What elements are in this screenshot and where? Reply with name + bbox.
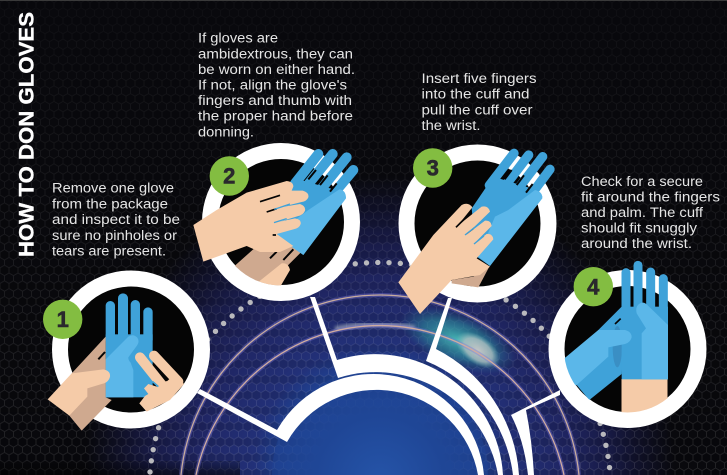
step 2 text: donning. (198, 124, 254, 139)
step 2 text: the proper hand before (198, 109, 353, 124)
wrist of right hand (622, 379, 668, 412)
badge 2 (210, 156, 249, 196)
right hand holding glove (139, 356, 184, 412)
top hand over glove (193, 181, 308, 262)
glove laid flat (270, 154, 353, 255)
glove partly on hand (472, 153, 550, 266)
badge 1 (43, 300, 82, 339)
step 3 text: the wrist. (422, 118, 480, 133)
step 4 text: around the wrist. (581, 236, 692, 251)
badge 1: 1 (57, 307, 69, 332)
gloved left hand, back portion (577, 307, 625, 400)
step 4 ring illustration (556, 265, 698, 420)
step 2 text: be worn on either hand. (198, 62, 355, 77)
badge 3: 3 (427, 156, 439, 181)
step 1 text: sure no pinholes or (52, 228, 178, 243)
badge 2: 2 (223, 164, 235, 189)
step 2 text: ambidextrous, they can (198, 46, 353, 61)
step 1 text: and inspect it to be (52, 212, 180, 227)
step 1 text (52, 181, 180, 259)
gloved right hand upright (622, 265, 668, 379)
step 2 ring illustration (193, 151, 353, 293)
badge 4 (574, 267, 613, 306)
badge 4: 4 (587, 274, 600, 299)
lower hand under glove (235, 246, 300, 286)
step 3 text (422, 71, 537, 133)
step 3 text: Insert five fingers (422, 71, 537, 86)
step 4 text: and palm. The cuff (581, 205, 703, 220)
step 2 text: If gloves are (198, 31, 278, 46)
badge 3 (413, 148, 452, 188)
step 1 ring illustration (48, 278, 202, 431)
step 1 text: Remove one glove (52, 181, 174, 196)
glove held up (106, 298, 153, 397)
connector arcs and lines (197, 297, 560, 475)
step 3 ring illustration (398, 152, 550, 314)
step 2 text: If not, align the glove's (198, 78, 347, 92)
step 3 text: into the cuff and (422, 87, 530, 102)
step 2 text: fingers and thumb with (198, 93, 352, 108)
step 4 text: Check for a secure (581, 174, 703, 189)
step 2 text (198, 31, 355, 139)
title: HOW TO DON GLOVES (15, 12, 38, 257)
step 4 text (581, 174, 720, 251)
hand entering cuff (398, 204, 493, 314)
step 4 text: should fit snuggly (581, 220, 697, 235)
step 3 text: pull the cuff over (422, 102, 533, 117)
step 4 text: fit around the fingers (581, 189, 720, 204)
gloved left hand, thumb side (563, 330, 632, 390)
step 1 text: tears are present. (52, 244, 166, 259)
dotted orbit ring (150, 262, 610, 472)
glowing orbit arcs with lens flare (181, 292, 579, 475)
step 1 text: from the package (52, 196, 168, 211)
left hand holding glove (48, 337, 112, 431)
